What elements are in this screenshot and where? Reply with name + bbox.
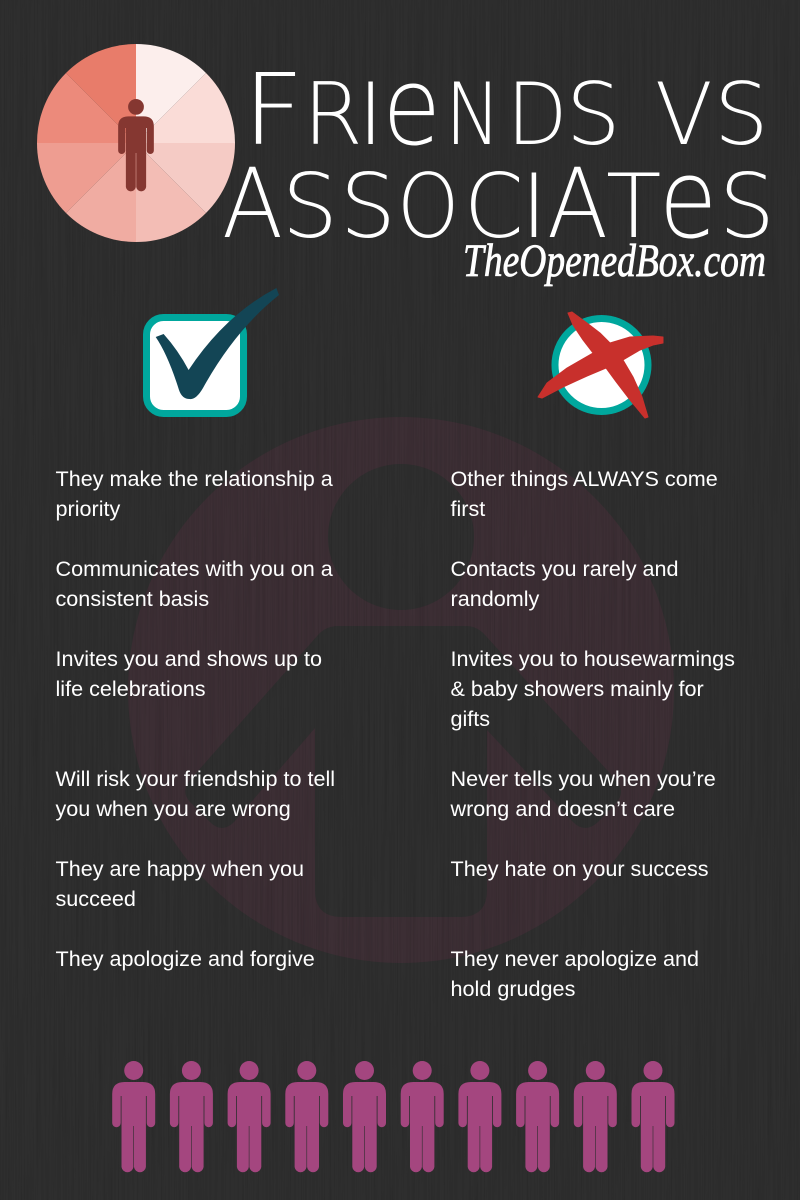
title: N <box>445 65 501 165</box>
associates text 2: randomly <box>450 586 539 611</box>
friends text 4: you when you are wrong <box>56 796 291 821</box>
title: O <box>397 155 459 258</box>
title: S <box>719 155 775 258</box>
title: S <box>282 155 338 258</box>
friends text 1: They make the relationship a <box>56 466 333 491</box>
associates text 2: Contacts you rarely and <box>450 556 679 581</box>
associates text 6 <box>450 946 699 1001</box>
title: T <box>606 156 661 259</box>
title: R <box>303 65 363 165</box>
row of purple people <box>112 1061 674 1172</box>
friends text 4 <box>56 766 335 821</box>
associates text 3 <box>450 646 735 731</box>
header icon: segmented pink circle with person <box>37 44 235 242</box>
friends text 2: consistent basis <box>56 586 209 611</box>
associates text 6: hold grudges <box>450 976 575 1001</box>
title: I <box>521 155 547 258</box>
icon: red cross over circle <box>538 312 663 418</box>
associates text 3: & baby showers mainly for <box>450 676 704 701</box>
associates text 1: Other things ALWAYS come <box>450 466 718 491</box>
title: e <box>659 136 717 264</box>
associates text 4: Never tells you when you’re <box>450 766 716 791</box>
friends text 4: Will risk your friendship to tell <box>56 766 335 791</box>
friends text 2 <box>56 556 333 611</box>
associates text 5: They hate on your success <box>450 856 709 881</box>
friends text 5 <box>56 856 304 911</box>
title: S <box>566 65 621 165</box>
friends text 1: priority <box>56 496 120 521</box>
associates text 3: gifts <box>450 706 490 731</box>
title: A <box>222 148 283 260</box>
associates text 6: They never apologize and <box>450 946 699 971</box>
friends text 2: Communicates with you on a <box>56 556 333 581</box>
associates text 1: first <box>450 496 485 521</box>
associates text 4: wrong and doesn’t care <box>450 796 675 821</box>
friends text 1 <box>56 466 333 521</box>
icon: check mark in box <box>146 288 279 414</box>
title: V <box>655 65 713 165</box>
friends text 3 <box>56 646 322 701</box>
title: A <box>547 148 608 260</box>
background icon: large person in circle <box>128 417 674 963</box>
friends text 3: Invites you and shows up to <box>56 646 322 671</box>
title: D <box>507 66 567 165</box>
friends text 5: They are happy when you <box>56 856 304 881</box>
associates text 1 <box>450 466 718 521</box>
title: F <box>243 54 304 168</box>
friends text 5: succeed <box>56 886 136 911</box>
title: e <box>382 44 441 169</box>
friends text 6: They apologize and forgive <box>56 946 315 971</box>
friends text 3: life celebrations <box>56 676 206 701</box>
title: S <box>714 65 769 165</box>
title: S <box>340 155 396 258</box>
associates text 4 <box>450 766 716 821</box>
associates text 3: Invites you to housewarmings <box>450 646 735 671</box>
title: C <box>464 157 524 258</box>
title: I <box>358 65 383 165</box>
title <box>222 44 775 264</box>
associates text 2 <box>450 556 679 611</box>
